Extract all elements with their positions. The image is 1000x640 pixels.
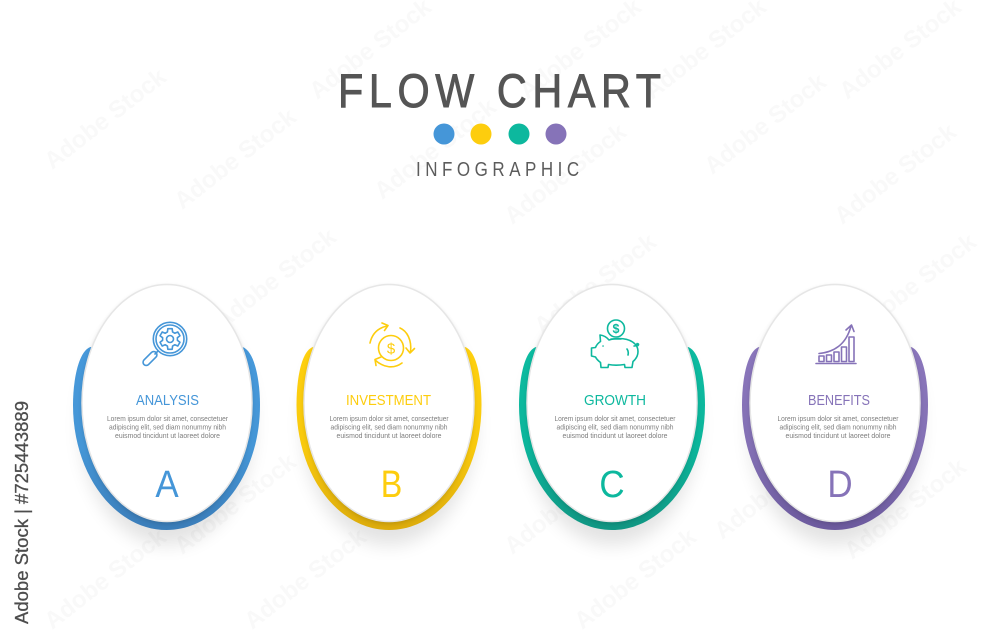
- watermark pattern: Adobe Stock: [499, 118, 632, 230]
- description: euismod tincidunt ut laoreet dolore: [336, 431, 442, 440]
- letter A: A: [155, 463, 179, 505]
- icon: magnifier with gear: [142, 322, 187, 367]
- description: Lorem ipsum dolor sit amet, consectetuer: [330, 414, 449, 423]
- card D shadow: [749, 305, 921, 545]
- watermark pattern: Adobe Stock: [169, 103, 302, 215]
- title: FLOW CHART: [338, 66, 661, 118]
- watermark pattern: Adobe Stock: [849, 228, 982, 340]
- description: [778, 414, 899, 440]
- description: euismod tincidunt ut laoreet dolore: [562, 431, 668, 440]
- heading: INVESTMENT: [346, 393, 431, 409]
- watermark pattern: Adobe Stock: [839, 453, 972, 565]
- panel: A analysis: [73, 284, 260, 545]
- card A coloured rim: [73, 347, 260, 530]
- letter D: D: [827, 463, 853, 505]
- card C coloured rim: [519, 347, 705, 530]
- card B coloured rim: [296, 347, 482, 530]
- icon: dollar with cycle arrows: $: [387, 340, 396, 358]
- card A white oval: [82, 284, 252, 524]
- card B white oval: [304, 284, 474, 524]
- description: [554, 414, 676, 440]
- icon: dollar with cycle arrows: [370, 323, 414, 367]
- description: adipiscing elit, sed diam nonummy nibh: [780, 422, 896, 432]
- letter C: C: [599, 463, 625, 505]
- card D white oval: [750, 284, 920, 524]
- watermark pattern: Adobe Stock: [529, 228, 662, 340]
- description: Lorem ipsum dolor sit amet, consectetuer: [554, 414, 676, 423]
- description: [330, 414, 449, 440]
- description: adipiscing elit, sed diam nonummy nibh: [556, 422, 674, 432]
- subtitle: INFOGRAPHIC: [416, 158, 579, 180]
- letter B: B: [381, 464, 402, 506]
- icon: piggy bank with coin: $: [613, 322, 620, 336]
- icon: rising bar chart: [816, 325, 856, 364]
- watermark pattern: Adobe Stock: [369, 93, 502, 205]
- card C shadow: [526, 305, 698, 545]
- icon: piggy bank with coin: [592, 320, 639, 368]
- watermark pattern: Adobe Stock: [829, 118, 962, 230]
- stock id caption: Adobe Stock | #725443889: [12, 401, 32, 624]
- panel: D benefits: [742, 284, 928, 545]
- watermark pattern: Adobe Stock: [239, 523, 372, 635]
- watermark pattern: Adobe Stock: [499, 448, 632, 560]
- card A shadow: [81, 305, 253, 545]
- description: [107, 414, 228, 440]
- panel: C growth: [519, 284, 705, 545]
- watermark pattern: Adobe Stock: [699, 68, 832, 180]
- description: adipiscing elit, sed diam nonummy nibh: [330, 422, 448, 432]
- card D coloured rim: [742, 347, 928, 530]
- description: Lorem ipsum dolor sit amet, consectetuer: [107, 414, 228, 423]
- watermark pattern: Adobe Stock: [209, 223, 342, 335]
- colour dots: [434, 124, 566, 144]
- description: euismod tincidunt ut laoreet dolore: [786, 431, 890, 440]
- panel: B investment: [296, 284, 482, 545]
- watermark pattern: Adobe Stock: [39, 63, 172, 175]
- description: adipiscing elit, sed diam nonummy nibh: [109, 422, 226, 432]
- heading: ANALYSIS: [136, 393, 199, 409]
- card B shadow: [303, 305, 475, 545]
- watermark pattern: Adobe Stock: [169, 448, 302, 560]
- watermark pattern: Adobe Stock: [709, 433, 842, 545]
- watermark pattern: Adobe Stock: [569, 523, 702, 635]
- description: euismod tincidunt ut laoreet dolore: [115, 431, 220, 440]
- heading: BENEFITS: [808, 393, 870, 409]
- card C white oval: [527, 284, 697, 524]
- heading: GROWTH: [584, 393, 646, 409]
- watermark pattern: Adobe Stock: [39, 523, 172, 635]
- description: Lorem ipsum dolor sit amet, consectetuer: [778, 414, 899, 423]
